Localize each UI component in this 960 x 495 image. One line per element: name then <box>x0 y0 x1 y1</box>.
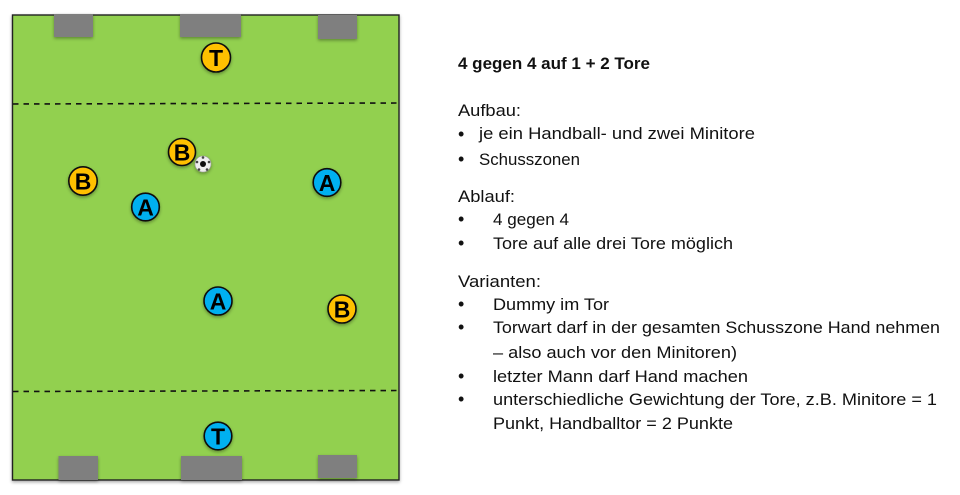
section: Ablauf: • <box>458 209 464 229</box>
section: Ablauf: • <box>458 233 464 253</box>
player: B right: B <box>334 296 350 322</box>
goals: top row <box>54 14 357 39</box>
section: Varianten: • <box>458 389 464 409</box>
icon: soccer ball <box>195 156 211 172</box>
player: B left <box>69 167 97 195</box>
player: A right: A <box>319 170 335 196</box>
player: B with ball: B <box>174 140 190 166</box>
section: Varianten: • <box>458 294 464 314</box>
section: Ablauf: Ablauf: <box>458 188 515 206</box>
section: Varianten <box>458 273 940 433</box>
section: Varianten: • <box>458 317 464 337</box>
section: Aufbau: • <box>458 149 464 169</box>
section: Varianten: Dummy im Tor <box>493 296 610 314</box>
text panel: exercise description <box>458 55 940 433</box>
panel: playing field <box>12 14 399 480</box>
section: Varianten: – also auch vor den Minitoren) <box>493 344 737 362</box>
player: B left: B <box>75 168 91 194</box>
player: bottom goalkeeper T <box>204 422 232 450</box>
player: B with ball <box>168 138 196 166</box>
player: A right <box>313 169 341 196</box>
section: Aufbau: je ein Handball- und zwei Minitore <box>478 125 755 143</box>
player: A left <box>132 193 159 221</box>
section: Varianten: Punkt, Handballtor = 2 Punkte <box>493 415 733 433</box>
top zone line <box>13 103 399 104</box>
section: Ablauf <box>458 188 733 253</box>
section: Ablauf: Tore auf alle drei Tore möglich <box>493 235 733 253</box>
bottom zone line <box>13 390 399 392</box>
goals: bottom row <box>58 455 357 480</box>
section: Varianten: Varianten: <box>458 273 541 291</box>
player: A center <box>204 287 232 315</box>
section: Aufbau: Schusszonen <box>479 151 580 169</box>
player: bottom goalkeeper T: T <box>211 424 225 450</box>
section: Ablauf: 4 gegen 4 <box>493 211 569 229</box>
field surface <box>12 15 399 480</box>
section: Varianten: Torwart darf in der gesamten Schusszone Hand nehmen <box>493 319 940 337</box>
section: Aufbau: Aufbau: <box>458 102 521 120</box>
section: Varianten: unterschiedliche Gewichtung der Tore, z.B. Minitore = 1 <box>493 391 937 409</box>
player: B right <box>328 295 356 323</box>
player: top goalkeeper T <box>202 43 230 72</box>
section: Aufbau <box>458 102 755 169</box>
player: top goalkeeper T: T <box>209 45 223 71</box>
player: A left: A <box>137 194 154 220</box>
section: Varianten: • <box>458 366 464 386</box>
heading: 4 gegen 4 auf 1 + 2 Tore <box>458 55 650 73</box>
section: Varianten: letzter Mann darf Hand machen <box>493 368 748 386</box>
player: A center: A <box>210 288 226 314</box>
section: Aufbau: • <box>458 124 464 144</box>
